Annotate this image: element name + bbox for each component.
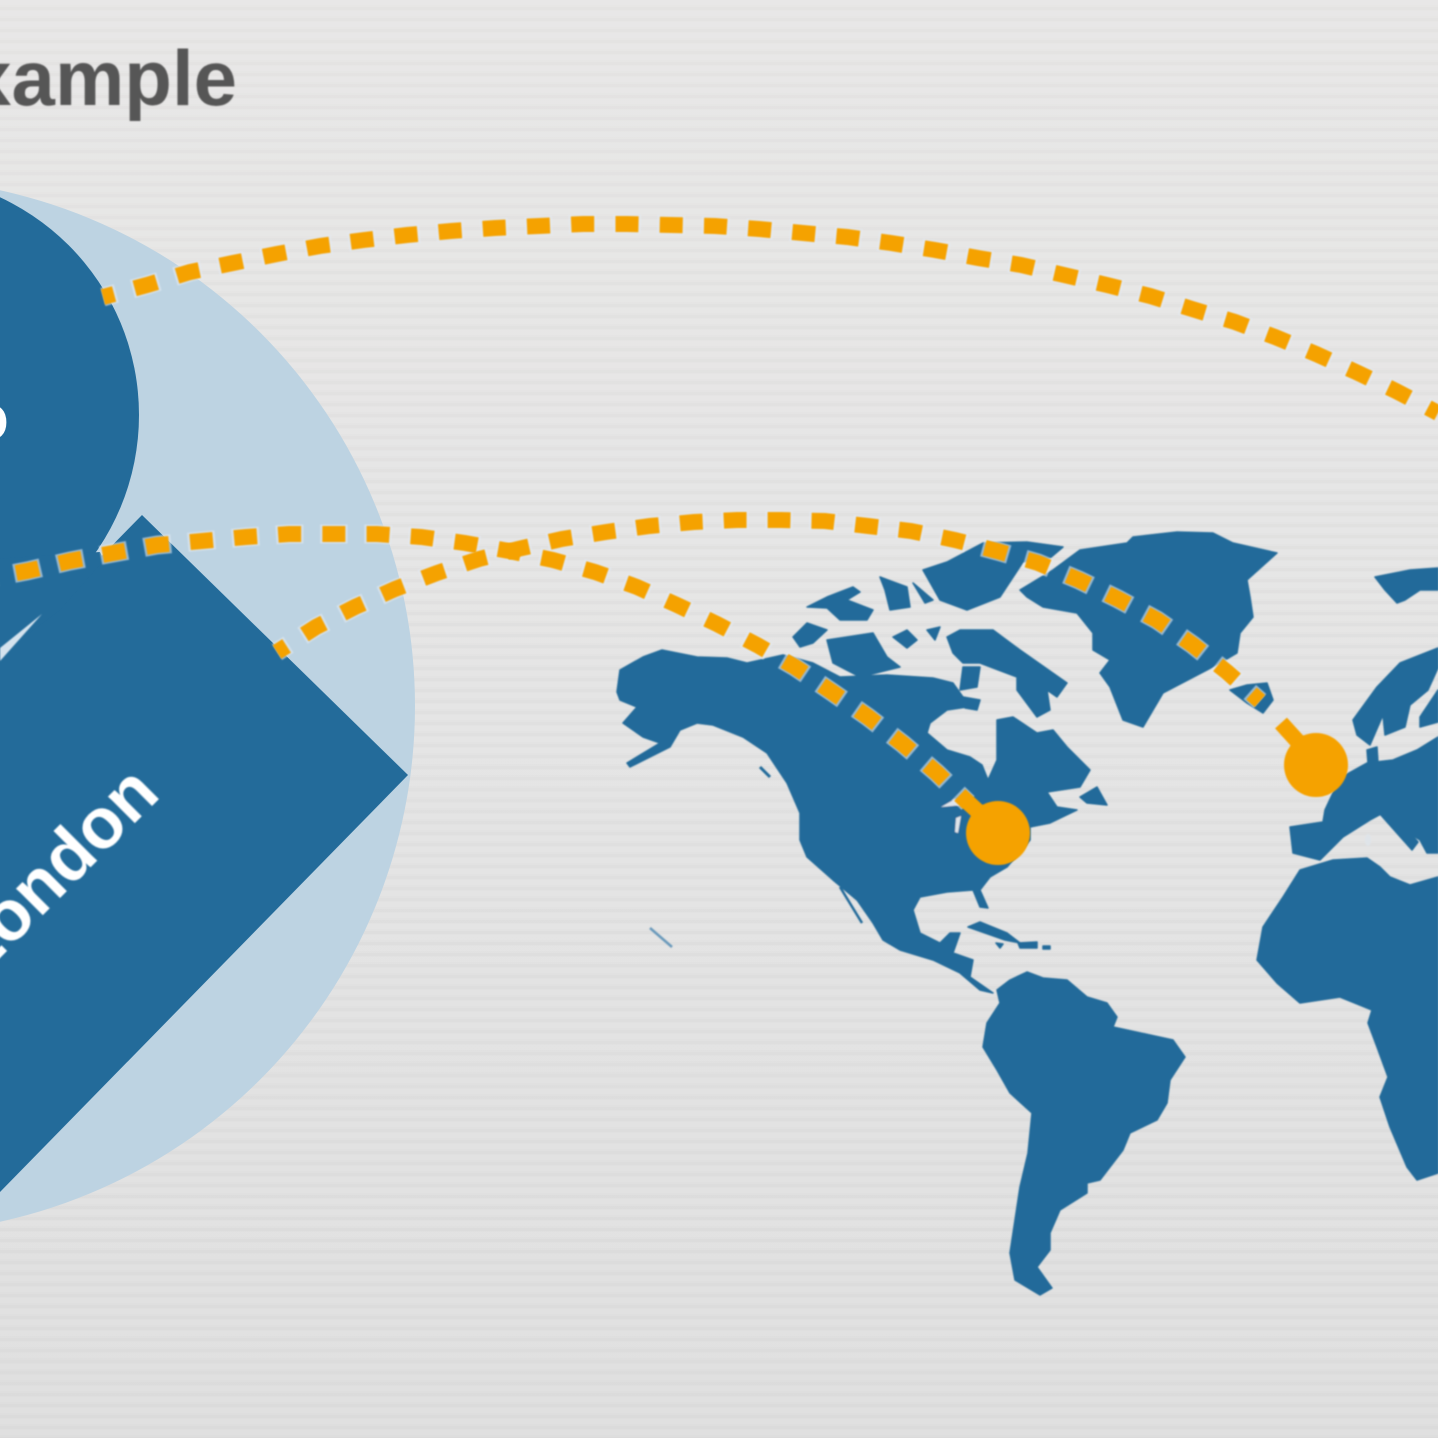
Denmark [1367, 747, 1378, 763]
Africa [1257, 858, 1438, 1180]
Caribbean islands [968, 922, 1050, 949]
Baja California [840, 887, 862, 923]
flight route: arc to North America [0, 534, 985, 818]
Greenland [1020, 532, 1277, 727]
South America [983, 972, 1185, 1295]
world map [617, 532, 1438, 1295]
flight route: arc to Europe [277, 520, 1300, 744]
North and Central America [617, 650, 1090, 993]
Iceland [1230, 683, 1273, 713]
route halos [0, 224, 1438, 803]
Arctic islands [793, 542, 1067, 717]
Vancouver Island [760, 767, 770, 777]
Scandinavia [1353, 648, 1438, 745]
Newfoundland [1080, 787, 1107, 805]
dark blue circle [0, 175, 139, 655]
Sardinia [1365, 834, 1371, 846]
Europe [1290, 737, 1438, 860]
panel: light blue circle with city shapes [0, 175, 415, 1234]
marker: Europe destination [1284, 733, 1348, 797]
marker: North America destination [966, 801, 1030, 865]
Svalbard [1375, 568, 1438, 603]
dark blue diamond: London [0, 515, 408, 1192]
light blue circle [0, 178, 415, 1234]
Great Lakes [941, 799, 962, 833]
Hawaii [650, 928, 672, 947]
flight route: arc to far right [103, 224, 1438, 413]
Italy [1380, 810, 1418, 850]
